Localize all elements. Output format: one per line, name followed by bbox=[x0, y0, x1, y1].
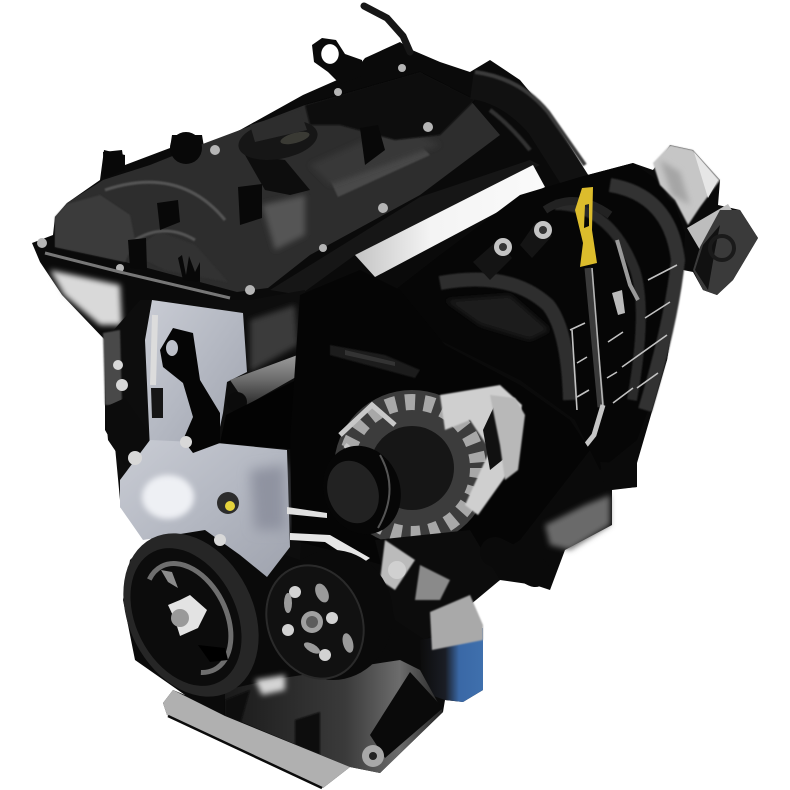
head silver edge bbox=[50, 270, 122, 325]
front runner bbox=[440, 279, 570, 400]
injector bosses bbox=[473, 221, 552, 280]
middle runner bbox=[555, 205, 641, 400]
pan mounting foot bbox=[362, 745, 384, 767]
rear runner bbox=[610, 185, 678, 410]
yellow handle bbox=[575, 187, 597, 267]
bent lower hose bbox=[495, 552, 535, 572]
lower right bracket bbox=[545, 462, 637, 550]
white fuel rail bar bbox=[355, 165, 545, 277]
throttle motor bbox=[693, 210, 758, 295]
cover dome right bbox=[130, 232, 228, 282]
lifting ring bbox=[312, 38, 362, 84]
top breather pipe bbox=[364, 6, 410, 52]
dark shadow under pipe bbox=[220, 378, 300, 450]
alternator right bracket bbox=[490, 395, 525, 480]
plate silver bolts bbox=[113, 360, 226, 546]
alternator silver housing bbox=[334, 390, 490, 546]
throttle body bbox=[653, 145, 758, 295]
valve cover bbox=[37, 64, 500, 295]
raised rail on cover bbox=[330, 145, 430, 197]
coolant pipe bbox=[227, 353, 303, 412]
vertical slot on plate bbox=[151, 388, 163, 418]
alternator bbox=[311, 385, 525, 546]
idler bolts bbox=[282, 586, 338, 661]
plate bright patch bbox=[142, 475, 194, 519]
crank hub bbox=[168, 595, 207, 636]
dipstick tube bbox=[510, 405, 603, 535]
crank pulley bbox=[97, 510, 285, 720]
oil filler cap bbox=[235, 110, 321, 195]
aluminium timing plate bbox=[120, 440, 290, 577]
lower accessory bracket bbox=[375, 530, 500, 640]
alternator pulley bbox=[311, 435, 413, 545]
intake manifold bbox=[395, 163, 685, 470]
silver struts bbox=[287, 507, 370, 565]
manifold lattice bbox=[570, 265, 677, 410]
side rail strip bbox=[45, 253, 230, 298]
oil pan bbox=[163, 660, 443, 788]
crank openings bbox=[161, 570, 178, 588]
block dark upper wall bbox=[105, 290, 305, 560]
central dark area bbox=[290, 270, 590, 590]
throttle neck bbox=[687, 204, 735, 250]
bolts on cover bbox=[37, 64, 433, 295]
pan silver flange bbox=[163, 690, 350, 788]
cover highlights bbox=[105, 182, 225, 240]
left bracket and sensor bbox=[103, 330, 147, 465]
rocker rail dark strip bbox=[270, 160, 540, 295]
oil filter bbox=[420, 595, 483, 702]
cover flat panel bbox=[262, 195, 305, 250]
aluminium upper plate bbox=[145, 300, 247, 450]
upper black throat bbox=[545, 201, 610, 215]
wiring and upper bracket bbox=[330, 345, 420, 378]
plate rib bbox=[153, 315, 155, 385]
pan body bbox=[225, 660, 443, 773]
manifold sensor bbox=[617, 240, 638, 300]
idler hub bbox=[301, 611, 323, 633]
yellow plug bbox=[217, 492, 239, 514]
black lifting bracket bbox=[160, 328, 220, 453]
black cover posts bbox=[103, 125, 385, 282]
coolant hose bbox=[472, 72, 585, 185]
idler slots bbox=[284, 581, 355, 656]
cover dome left bbox=[55, 195, 135, 262]
dark ignition coil area bbox=[305, 72, 475, 140]
oil dipstick bbox=[510, 187, 603, 535]
idler pulley bbox=[250, 550, 393, 693]
